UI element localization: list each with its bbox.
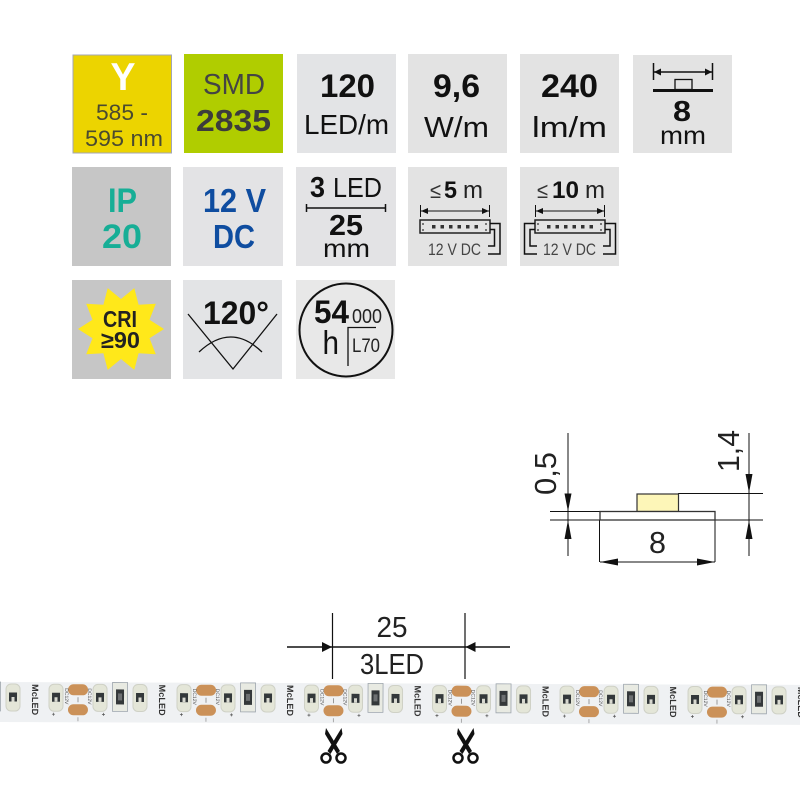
strip segment: DC12V bbox=[469, 690, 476, 707]
strip segment: DC12V bbox=[63, 688, 69, 705]
cross-section dimension drawing bbox=[528, 430, 763, 566]
tile: 120 LED/m: LED/m bbox=[304, 109, 389, 140]
tile: 9,6 W/m: W/m bbox=[424, 112, 489, 144]
label: 8: 8 bbox=[649, 525, 666, 560]
tile: max 10 m run: 10 bbox=[552, 177, 579, 204]
icon: scissors left cut mark bbox=[322, 728, 346, 762]
tile: 8 mm width: mm bbox=[660, 122, 706, 150]
strip segment: McLED bbox=[668, 686, 678, 718]
strip segment: DC12V bbox=[446, 690, 453, 706]
tile: yellow colour 585-595 nm: 595 nm bbox=[85, 126, 163, 151]
label: 0,5: 0,5 bbox=[528, 452, 563, 495]
tile: SMD 2835: SMD bbox=[203, 69, 265, 101]
tile: CRI at least 90 bbox=[72, 280, 171, 379]
tile: 3 LED per 25 mm: 3 bbox=[310, 172, 325, 204]
tile: yellow colour 585-595 nm bbox=[73, 55, 172, 153]
icon: strip with one-side feed bbox=[420, 205, 500, 254]
strip segment bbox=[688, 685, 800, 724]
strip segment: DC12V bbox=[725, 691, 731, 707]
LED chip cross-section bbox=[637, 494, 678, 512]
icon: scissors right cut mark bbox=[454, 728, 478, 762]
tile: 54000 h lifetime L70: 54 bbox=[314, 294, 349, 330]
strip segment bbox=[177, 683, 295, 722]
icon: strip with two-side feed bbox=[524, 205, 616, 254]
tile: 54000 h lifetime L70: L70 bbox=[352, 336, 380, 357]
strip segment: McLED bbox=[412, 686, 423, 717]
tile: 12 V DC: DC bbox=[213, 218, 255, 255]
strip segment bbox=[304, 683, 423, 723]
tile: 120 degree beam angle: 120° bbox=[203, 295, 269, 331]
strip segment: McLED bbox=[30, 684, 40, 716]
tile: IP 20: 20 bbox=[102, 218, 142, 256]
strip segment: DC12V bbox=[597, 690, 603, 707]
tile: max 5 m run: m bbox=[463, 177, 483, 204]
tile: max 5 m run: 12 V DC bbox=[428, 240, 481, 259]
strip segment bbox=[560, 684, 678, 723]
tile: 9,6 W/m bbox=[408, 54, 507, 153]
tile: 8 mm width: 8 bbox=[673, 96, 691, 128]
tile: SMD 2835: 2835 bbox=[196, 103, 271, 138]
tile: IP 20 bbox=[72, 167, 171, 266]
strip board cross-section bbox=[600, 512, 715, 520]
tile: 240 lm/m bbox=[520, 54, 619, 153]
strip segment: DC12V bbox=[86, 688, 92, 705]
strip segment: DC12V bbox=[318, 689, 325, 706]
strip segment: McLED bbox=[285, 685, 295, 717]
icon: beam angle bbox=[188, 314, 277, 369]
tile: 3 LED per 25 mm bbox=[296, 167, 396, 266]
tile: yellow colour 585-595 nm: 585 - bbox=[96, 100, 148, 125]
tile: 120 degree beam angle bbox=[183, 280, 282, 379]
icon: strip width arrow bbox=[653, 63, 713, 92]
tile: max 10 m run bbox=[520, 167, 619, 266]
tile: 54000 h lifetime L70: h bbox=[322, 324, 339, 361]
dimension arrowheads bbox=[564, 474, 752, 566]
tile: 240 lm/m: lm/m bbox=[532, 112, 607, 144]
strip segment bbox=[49, 682, 167, 722]
icon: yellow star badge bbox=[78, 288, 164, 370]
tile: max 5 m run: ≤ bbox=[430, 178, 441, 203]
strip segment: DC12V bbox=[574, 690, 580, 707]
strip segment: McLED bbox=[540, 686, 551, 718]
tile: 120 LED/m bbox=[297, 54, 396, 153]
tile: SMD 2835 bbox=[184, 54, 283, 153]
strip segment bbox=[432, 684, 551, 723]
tile: 54000 h lifetime L70: 000 bbox=[352, 306, 382, 328]
tile: 120 LED/m: 120 bbox=[320, 68, 375, 104]
tile: 9,6 W/m: 9,6 bbox=[433, 68, 480, 104]
tile: 12 V DC bbox=[183, 167, 283, 266]
tile: CRI at least 90: CRI bbox=[103, 306, 137, 332]
tile: 3 LED per 25 mm: 25 bbox=[329, 210, 363, 242]
cut spacing dimension 25 / 3LED: 3LED bbox=[360, 649, 424, 681]
tile: 8 mm width bbox=[633, 55, 732, 153]
tile: 3 LED per 25 mm: LED bbox=[333, 172, 382, 203]
label: 1,4: 1,4 bbox=[711, 430, 746, 472]
strip segment: DC12V bbox=[702, 691, 708, 707]
tile: 3 LED per 25 mm: mm bbox=[323, 235, 370, 263]
tile: 54000 h lifetime L70 bbox=[296, 280, 395, 379]
tile: yellow colour 585-595 nm: Y bbox=[110, 56, 136, 99]
tile: 240 lm/m: 240 bbox=[541, 68, 598, 104]
strip segment: DC12V bbox=[341, 689, 348, 706]
tile: IP 20: IP bbox=[108, 182, 137, 220]
strip segment: McLED bbox=[157, 685, 167, 716]
cut spacing dimension 25 / 3LED bbox=[287, 612, 510, 681]
tile: max 10 m run: 12 V DC bbox=[543, 240, 596, 259]
tile: max 5 m run bbox=[408, 167, 507, 266]
tile: max 10 m run: ≤ bbox=[537, 178, 548, 203]
tile: 12 V DC: 12 V bbox=[203, 182, 266, 219]
strip segment: DC12V bbox=[191, 689, 197, 706]
cut spacing dimension 25 / 3LED: 25 bbox=[376, 612, 408, 644]
tile: max 10 m run: m bbox=[585, 177, 605, 204]
strip segment bbox=[0, 682, 40, 721]
LED strip bbox=[0, 682, 800, 725]
tile: max 5 m run: 5 bbox=[444, 177, 457, 204]
strip segment: DC12V bbox=[214, 689, 220, 706]
tile: CRI at least 90: ≥90 bbox=[101, 327, 140, 353]
